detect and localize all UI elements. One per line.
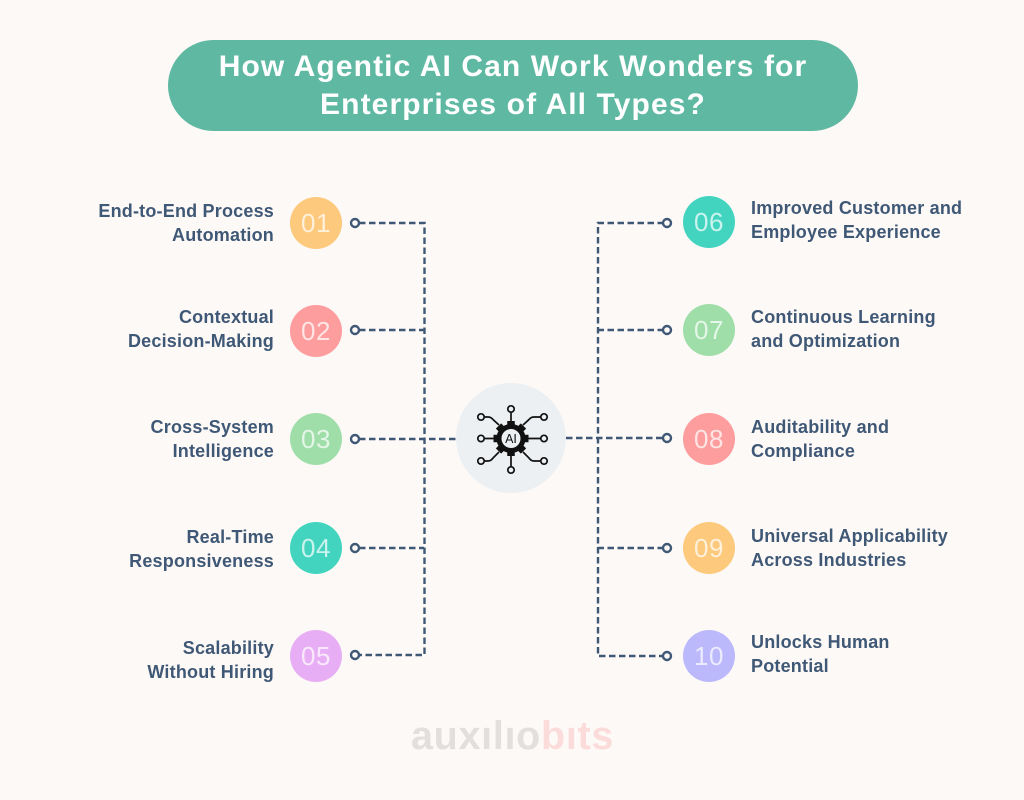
left item 3 label: Cross-System [151, 417, 274, 437]
right item 8 number: 08 [694, 424, 724, 454]
right item 10 label [751, 632, 890, 676]
central AI icon [456, 383, 566, 493]
title banner [168, 40, 858, 131]
left item 1 label: End-to-End Process [98, 201, 274, 221]
left item 3 number [290, 413, 342, 465]
right item 6 label [751, 198, 962, 242]
left item 4 number: 04 [301, 533, 331, 563]
right item 9 number [683, 522, 735, 574]
right item 10 number [683, 630, 735, 682]
right item 9 number: 09 [694, 533, 724, 563]
right item 6 number: 06 [694, 207, 724, 237]
left item 4 number [290, 522, 342, 574]
left item 5 number: 05 [301, 641, 331, 671]
right item 8 number [683, 413, 735, 465]
logo wordmark: auxılıobıts [411, 714, 614, 758]
left item 2 label [128, 307, 274, 351]
right item 9 label: Universal Applicability [751, 526, 948, 546]
left item 3 label: Intelligence [173, 440, 274, 460]
right item 10 label: Potential [751, 656, 829, 676]
left item 5 label [147, 638, 274, 682]
right item 9 label: Across Industries [751, 550, 906, 570]
left item 5 label: Without Hiring [147, 662, 274, 682]
left item 1 label [98, 201, 274, 244]
right item 8 label: Auditability and [751, 417, 889, 437]
left item 2 number [290, 305, 342, 357]
right item 10 label: Unlocks Human [751, 632, 890, 652]
right item 8 label [751, 417, 889, 461]
left item 1 label: Automation [172, 224, 274, 244]
left item 1 number [290, 197, 342, 249]
left item 2 label: Contextual [179, 307, 274, 327]
left item 2 label: Decision-Making [128, 330, 274, 350]
right item 6 label: Improved Customer and [751, 198, 962, 218]
left item 1 number: 01 [301, 208, 331, 238]
left item 5 label: Scalability [183, 638, 274, 658]
left item 4 label: Responsiveness [129, 550, 274, 570]
title banner: Enterprises of All Types? [320, 88, 706, 121]
right item 7 number [683, 304, 735, 356]
left item 4 label [129, 527, 274, 571]
right item 10 number: 10 [694, 641, 724, 671]
right item 7 label: and Optimization [751, 330, 900, 350]
left item 5 number [290, 630, 342, 682]
left item 3 label [151, 417, 274, 461]
right item 7 label [751, 307, 936, 351]
right item 8 label: Compliance [751, 440, 855, 460]
left item 3 number: 03 [301, 424, 331, 454]
central AI icon: AI [505, 432, 517, 446]
right item 7 label: Continuous Learning [751, 307, 936, 327]
left item 4 label: Real-Time [186, 527, 274, 547]
left item 2 number: 02 [301, 316, 331, 346]
right item 7 number: 07 [694, 315, 724, 345]
right item 9 label [751, 526, 948, 570]
title banner: How Agentic AI Can Work Wonders for [219, 50, 807, 83]
right item 6 number [683, 196, 735, 248]
right item 6 label: Employee Experience [751, 222, 941, 242]
